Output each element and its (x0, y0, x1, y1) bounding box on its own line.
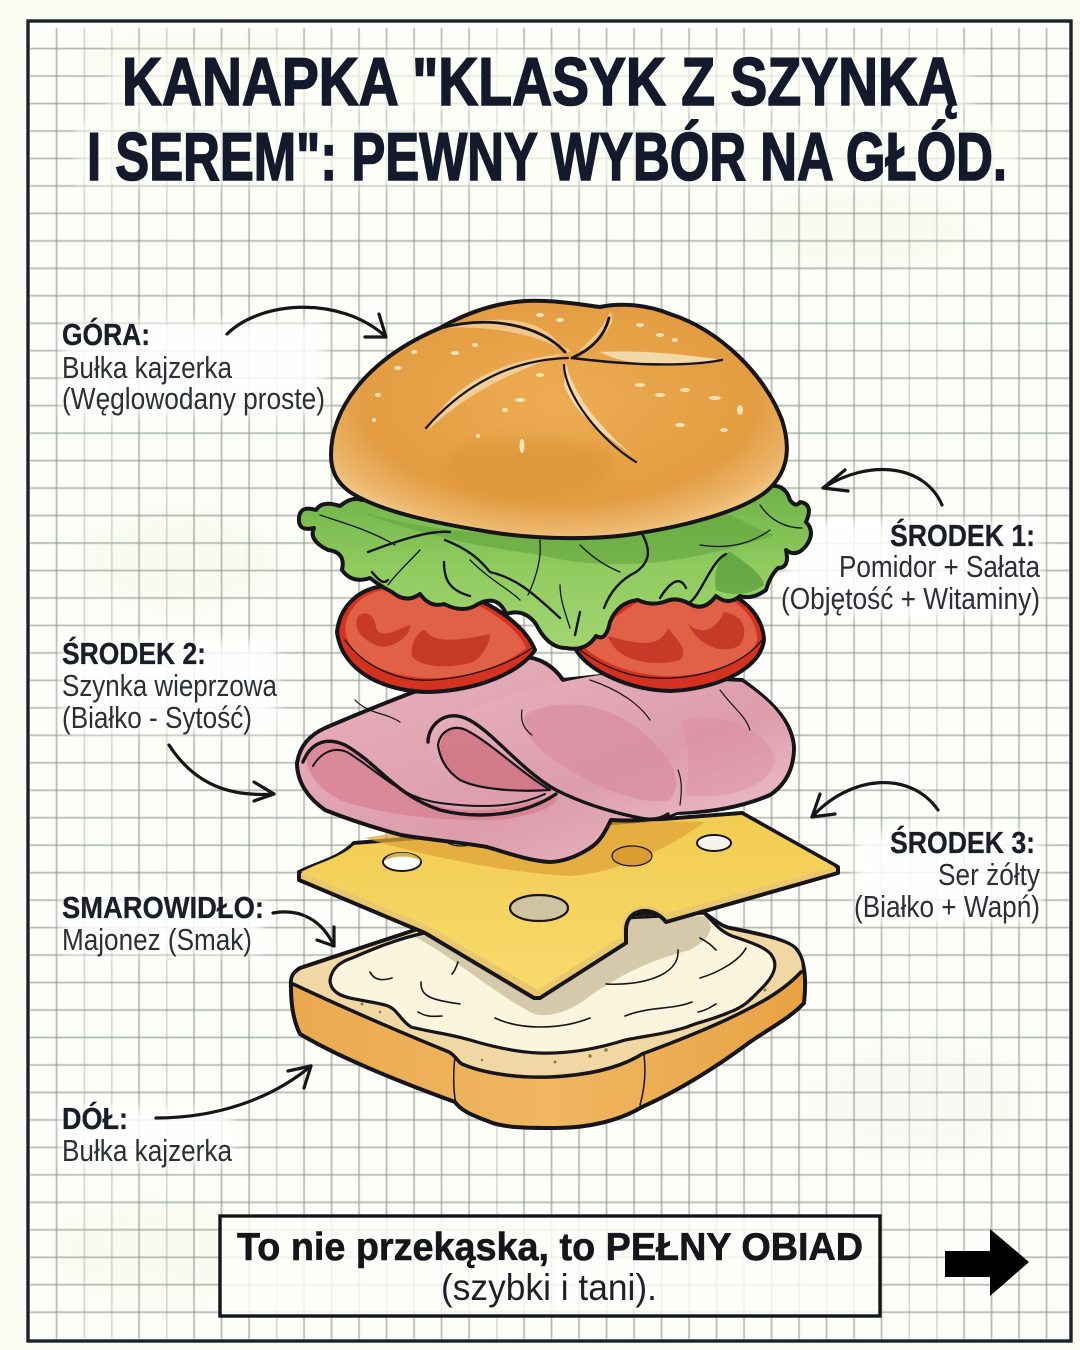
label: DÓŁ: DÓŁ: (62, 1100, 128, 1136)
arrow: bottom bread (156, 1066, 311, 1118)
label: ŚRODEK 3 (854, 824, 1040, 924)
label: ŚRODEK 1: (Objętość + Witaminy) (781, 581, 1040, 616)
label: DÓŁ (62, 1100, 233, 1168)
cheese holes (383, 834, 731, 921)
arrow: top bun (227, 307, 386, 337)
label: ŚRODEK 3: Ser żółty (938, 857, 1040, 892)
label: SMAROWIDŁO: SMAROWIDŁO: (62, 890, 264, 925)
lettuce (299, 486, 811, 649)
title (87, 44, 1007, 195)
cheese slice (299, 813, 838, 998)
label: GÓRA: Bułka kajzerka (62, 350, 233, 385)
callout: summary box (220, 1216, 880, 1316)
mayonnaise (330, 913, 775, 1053)
ham slices (297, 657, 794, 862)
label: SMAROWIDŁO (62, 890, 264, 957)
callout: summary box: (szybki i tani). (441, 1267, 657, 1308)
label: ŚRODEK 1: ŚRODEK 1: (890, 517, 1035, 553)
callout: summary box: To nie przekąska, to PEŁNY OBIAD (237, 1226, 863, 1269)
label: ŚRODEK 1 (781, 517, 1041, 616)
arrow: lettuce and tomato (823, 469, 942, 505)
label: GÓRA (62, 316, 325, 416)
right tomato (576, 590, 764, 691)
label: ŚRODEK 2 (62, 635, 278, 735)
label: GÓRA: (Węglowodany proste) (62, 381, 325, 416)
arrow: mayonnaise (273, 912, 334, 946)
arrow: next page (945, 1229, 1029, 1296)
tomato slices (337, 586, 764, 692)
label: DÓŁ: Bułka kajzerka (62, 1133, 233, 1168)
left tomato (337, 586, 535, 692)
label halos (62, 322, 1040, 1164)
top bun (331, 301, 787, 538)
label: SMAROWIDŁO: Majonez (Smak) (62, 922, 252, 957)
label: ŚRODEK 2: ŚRODEK 2: (62, 635, 206, 671)
label: ŚRODEK 3: (Białko + Wapń) (854, 889, 1040, 924)
label: ŚRODEK 1: Pomidor + Sałata (839, 549, 1041, 584)
label: ŚRODEK 2: (Białko - Sytość) (62, 700, 252, 735)
sandwich illustration (291, 301, 838, 1128)
arrow: ham (169, 745, 274, 801)
label: ŚRODEK 3: ŚRODEK 3: (890, 824, 1035, 860)
label: GÓRA: GÓRA: (62, 316, 150, 352)
arrow: cheese (812, 783, 938, 817)
label: ŚRODEK 2: Szynka wieprzowa (62, 668, 278, 703)
bottom bread slice (291, 910, 805, 1128)
